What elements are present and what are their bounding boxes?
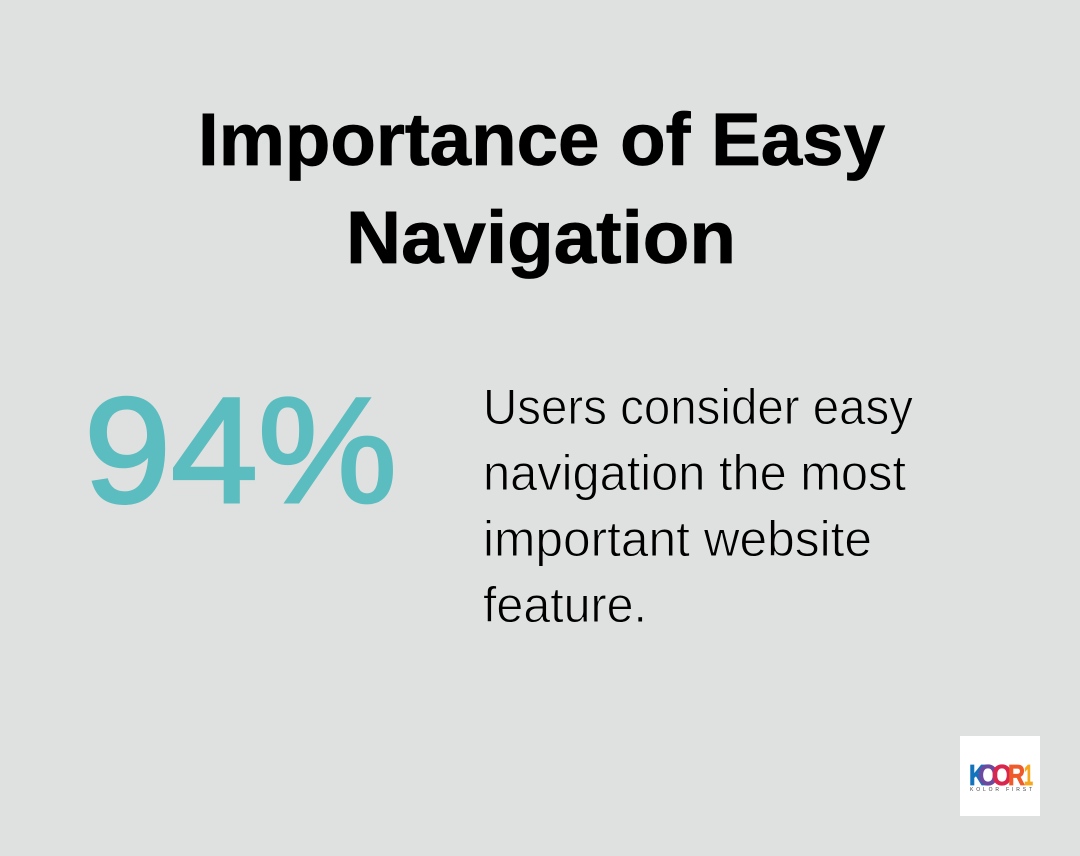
statistic: 94%: 94%: [84, 366, 397, 534]
description text: feature.: [483, 577, 647, 633]
description text: [483, 379, 913, 633]
logo: Koor1 Kolor First: O: [978, 760, 998, 792]
title: [198, 98, 885, 279]
description text: Users consider easy: [483, 379, 913, 435]
title: Importance of Easy: [198, 98, 885, 181]
logo: Koor1 Kolor First: KOLOR FIRST: [970, 787, 1032, 793]
logo: Koor1 Kolor First: R: [1008, 760, 1025, 792]
logo: Koor1 Kolor First: K: [969, 760, 986, 792]
title: Navigation: [346, 196, 736, 279]
logo: Koor1 Kolor First: [960, 736, 1040, 816]
logo: Koor1 Kolor First: O: [992, 760, 1012, 792]
description text: navigation the most: [483, 445, 906, 501]
description text: important website: [483, 511, 872, 567]
logo: Koor1 Kolor First: 1: [1024, 760, 1033, 792]
